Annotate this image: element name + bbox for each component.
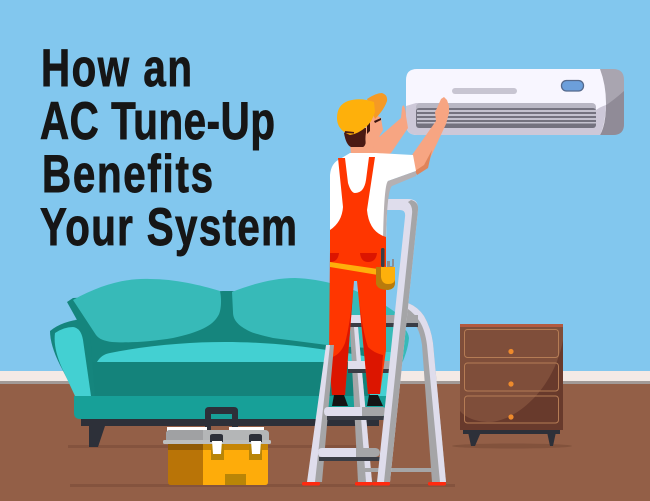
ladder platform xyxy=(350,315,418,327)
ladder feet xyxy=(302,482,446,486)
air conditioner xyxy=(406,69,624,135)
baseboard xyxy=(0,371,650,384)
sofa base xyxy=(74,396,395,419)
ladder front right rail xyxy=(377,199,418,482)
ac body xyxy=(406,69,606,135)
ladder lower brace xyxy=(365,468,433,472)
sofa seat front xyxy=(90,362,395,397)
worker near arm xyxy=(412,97,449,173)
worker tools xyxy=(381,248,394,269)
sofa leg xyxy=(89,426,105,447)
ac vent xyxy=(416,103,596,128)
sofa back frame xyxy=(67,291,395,400)
worker far arm xyxy=(368,105,408,157)
worker tool pouch xyxy=(376,267,395,290)
worker belt xyxy=(330,262,378,275)
toolbox notch xyxy=(225,474,246,485)
wall background xyxy=(0,0,650,372)
worker shirt xyxy=(330,153,416,240)
title: Benefits xyxy=(42,144,213,203)
title: Your System xyxy=(40,197,297,256)
worker face xyxy=(365,114,383,149)
sofa back cushion left xyxy=(73,279,221,342)
worker cap xyxy=(337,93,387,135)
toolbox white strip xyxy=(167,427,264,431)
worker pockets xyxy=(330,253,377,262)
toolbox body xyxy=(203,443,268,485)
ladder front left rail xyxy=(307,345,333,482)
dresser xyxy=(460,324,563,446)
ladder step upper xyxy=(324,407,387,420)
toolbox latches xyxy=(210,434,262,460)
sofa back cushion right xyxy=(232,278,395,349)
dresser knobs xyxy=(508,349,514,420)
ac side cap xyxy=(590,69,624,135)
ladder step lower xyxy=(318,448,380,461)
floor shadows xyxy=(68,444,572,487)
ladder back inner leg xyxy=(350,327,372,482)
dresser drawers xyxy=(464,330,558,423)
dresser body xyxy=(460,324,563,430)
sofa seat cushion xyxy=(97,342,392,362)
worker arm shadow xyxy=(415,150,432,175)
sofa xyxy=(50,278,409,447)
toolbox body shade xyxy=(168,443,203,485)
ladder mid bar xyxy=(348,361,390,373)
ac display xyxy=(562,80,584,91)
worker xyxy=(330,93,449,290)
toolbox handle xyxy=(205,407,238,432)
sofa left arm xyxy=(50,319,95,396)
floor xyxy=(0,384,650,501)
ladder back right leg xyxy=(404,303,446,482)
toolbox lid xyxy=(166,430,269,441)
worker shoes xyxy=(332,395,383,406)
title xyxy=(40,38,297,256)
dresser legs xyxy=(468,432,556,446)
ladder xyxy=(302,199,446,486)
toolbox xyxy=(163,407,271,485)
worker neck xyxy=(350,142,375,155)
worker legs xyxy=(329,250,386,406)
sofa underside xyxy=(81,419,379,426)
worker hair xyxy=(344,128,367,147)
ac status slot xyxy=(452,88,517,94)
sofa right arm xyxy=(370,318,409,396)
title: How an xyxy=(41,38,192,97)
title: AC Tune-Up xyxy=(40,91,275,150)
worker overalls bib xyxy=(330,157,386,260)
